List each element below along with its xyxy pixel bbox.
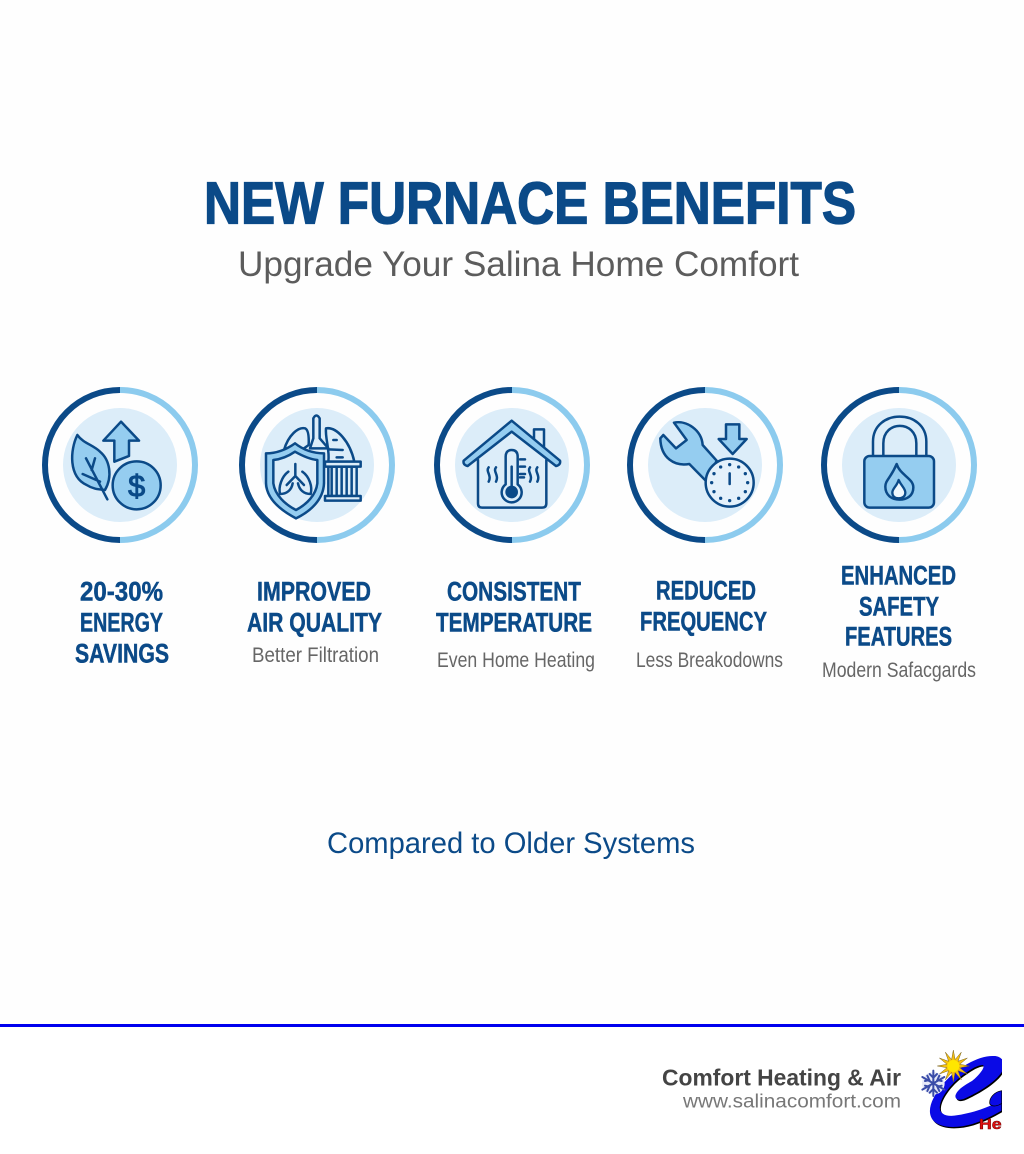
heading bbox=[640, 576, 767, 636]
footer rule bbox=[0, 1024, 1024, 1027]
heading: 20-30% bbox=[80, 576, 163, 606]
company logo bbox=[922, 1050, 1005, 1133]
ring and disc bbox=[824, 390, 974, 540]
heading: IMPROVED bbox=[257, 576, 371, 606]
comparison note: Compared to Older Systems bbox=[327, 827, 695, 860]
icon: house with thermometer bbox=[463, 421, 560, 508]
title: NEW FURNACE BENEFITS bbox=[204, 170, 856, 236]
heading bbox=[75, 576, 169, 668]
heading: ENHANCED bbox=[841, 560, 956, 590]
heading: SAVINGS bbox=[75, 638, 169, 668]
subtitle: Upgrade Your Salina Home Comfort bbox=[238, 245, 799, 284]
caption: Even Home Heating bbox=[437, 649, 595, 672]
icon: padlock with flame bbox=[864, 417, 934, 508]
heading: CONSISTENT bbox=[447, 576, 581, 606]
icon: leaf, up arrow and dollar coin: $ bbox=[128, 469, 145, 503]
website: www.salinacomfort.com bbox=[682, 1092, 901, 1112]
heading bbox=[247, 576, 382, 638]
icon: shield, lungs and filter bbox=[266, 415, 361, 518]
benefit 1: energy savings bbox=[45, 390, 195, 668]
benefit 3: consistent temperature bbox=[436, 390, 595, 672]
heading: ENERGY bbox=[80, 608, 163, 638]
heading: AIR QUALITY bbox=[247, 608, 382, 638]
heading: SAFETY bbox=[859, 592, 939, 622]
company logo: He bbox=[979, 1117, 1002, 1133]
icon: leaf, up arrow and dollar coin bbox=[72, 422, 161, 509]
heading: FREQUENCY bbox=[640, 606, 767, 636]
caption: Modern Safacgards bbox=[822, 659, 976, 682]
benefit 2: air quality bbox=[242, 390, 392, 667]
benefit 4: reduced frequency bbox=[630, 390, 783, 672]
caption: Better Filtration bbox=[252, 644, 379, 667]
icon: wrench, down arrow and clock bbox=[660, 422, 754, 507]
heading: TEMPERATURE bbox=[436, 608, 592, 638]
benefit 5: enhanced safety bbox=[822, 390, 976, 682]
heading: FEATURES bbox=[845, 622, 952, 652]
ring and disc bbox=[437, 390, 587, 540]
heading bbox=[436, 576, 592, 638]
heading: REDUCED bbox=[656, 576, 756, 606]
ring and disc bbox=[630, 390, 780, 540]
ring and disc bbox=[242, 390, 392, 540]
heading bbox=[841, 560, 956, 652]
caption: Less Breakodowns bbox=[636, 649, 783, 672]
footer band bbox=[0, 1027, 1024, 1154]
ring and disc bbox=[45, 390, 195, 540]
company name: Comfort Heating & Air bbox=[662, 1064, 901, 1090]
